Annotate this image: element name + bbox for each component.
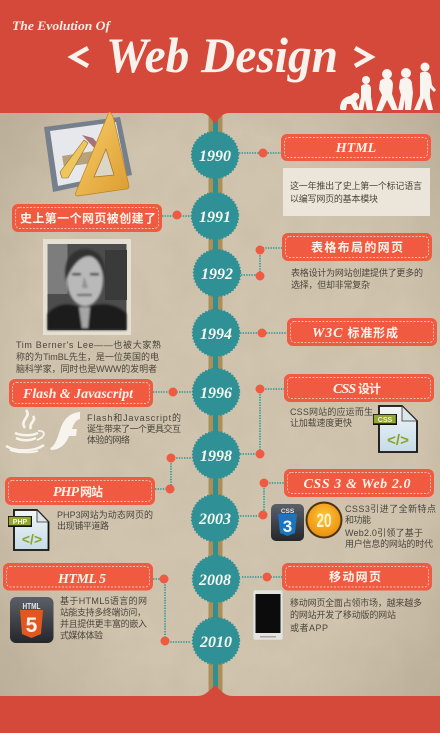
banner: CSS3 and Web 2.0 xyxy=(284,469,434,497)
year badge: 1996 xyxy=(193,369,239,415)
text: PHP description: PHP3网站为动态网页的 xyxy=(57,509,153,520)
text: CSS3 and Web 2.0 description: Web2.0引领了基于 xyxy=(345,527,423,538)
top header band xyxy=(0,0,440,124)
icon: CSS3 xyxy=(271,504,304,541)
text: CSS description: CSS网站的应运而生 xyxy=(290,406,373,417)
year badge: 2003 xyxy=(192,495,238,541)
banner: CSS3 and Web 2.0: CSS 3 & Web 2.0 xyxy=(304,477,410,492)
year badge: 1994: 1994 xyxy=(200,326,232,343)
text: mobile web description: 的网站开发了移动版的网站 xyxy=(290,609,396,620)
year badge: 1990 xyxy=(192,132,238,178)
year badge: 1990: 1990 xyxy=(199,148,231,165)
year badge: 1998 xyxy=(193,432,239,478)
text: mobile web description: 或者APP xyxy=(290,622,328,633)
text: HTML5 description xyxy=(60,595,147,640)
year badge: 2010 xyxy=(193,618,239,664)
icon: CSS file xyxy=(373,406,417,452)
text: CSS3 and Web 2.0 description: 和功能 xyxy=(345,514,371,525)
icon: PHP file xyxy=(8,510,48,550)
icon: web 2.0 coin xyxy=(306,502,342,538)
connector lines xyxy=(153,153,287,642)
icon: web 2.0 coin: 20 xyxy=(316,511,332,532)
icon: CSS3: CSS xyxy=(281,508,295,515)
year badge: 2003: 2003 xyxy=(198,511,231,528)
banner: table layout: 表格布局的网页 xyxy=(311,238,403,256)
text: flash description: 体验的网络 xyxy=(87,434,130,445)
connector dots xyxy=(160,148,272,646)
banner: HTML 5: HTML 5 xyxy=(57,572,106,587)
text: table layout description: 选择，但却非常复杂 xyxy=(291,279,370,290)
icon: CSS file: CSS xyxy=(378,417,393,424)
text: HTML5 description: 基于HTML5语言的网 xyxy=(60,595,147,606)
text: Tim Berners-Lee bio: 脑科学家，同时也是WWW的发明者 xyxy=(16,363,157,374)
icon: PHP file: PHP xyxy=(13,519,28,526)
banner: HTML 5 xyxy=(3,563,153,590)
main title: Web Design xyxy=(106,27,338,83)
year badge: 1996: 1996 xyxy=(200,385,232,402)
year badge: 2008: 2008 xyxy=(198,572,231,589)
banner: W3C: W3C 标准形成 xyxy=(312,324,398,341)
icon: PHP file: </> xyxy=(22,531,42,547)
banner: Flash & Javascript xyxy=(9,379,153,407)
banner: mobile web xyxy=(282,563,432,590)
text: HTML5 description: 式媒体体验 xyxy=(60,630,103,640)
text: CSS description xyxy=(290,406,373,428)
text: Tim Berners-Lee bio: 称的为TimBL先生，是一位英国的电 xyxy=(16,351,159,362)
text: CSS3 and Web 2.0 description xyxy=(345,503,436,549)
year badge: 2008 xyxy=(193,556,239,602)
subtitle: The Evolution Of xyxy=(12,18,112,33)
banner: HTML xyxy=(281,134,431,161)
banner: HTML: HTML xyxy=(335,141,376,156)
photo: Tim Berners-Lee xyxy=(43,239,131,335)
year badge: 1991: 1991 xyxy=(199,209,231,226)
icon: phone xyxy=(253,590,283,640)
text: HTML5 description: 站能支持多终端访问， xyxy=(60,606,146,618)
icon: flash logo xyxy=(50,412,80,450)
year badge: 1998: 1998 xyxy=(200,448,232,465)
text: Tim Berners-Lee bio xyxy=(16,339,161,374)
icon: CSS file: </> xyxy=(387,432,409,449)
year badge: 2010: 2010 xyxy=(199,634,232,651)
icon: CSS3: 3 xyxy=(283,517,292,536)
text: mobile web description: 移动网页全面占领市场，越来越多 xyxy=(290,597,422,608)
icon: drafting tools xyxy=(44,112,132,196)
text: CSS3 and Web 2.0 description: 用户信息的网站的时代 xyxy=(345,538,433,549)
year badge: 1994 xyxy=(193,310,239,356)
banner: first web page xyxy=(12,204,162,232)
text: flash description: 诞生带来了一个更具交互 xyxy=(87,423,181,434)
panel: HTML description: 以编写网页的基本模块 xyxy=(290,193,378,204)
text: PHP description: 出现铺平道路 xyxy=(57,520,109,531)
icon: HTML5: HTML xyxy=(22,601,40,611)
text: flash description xyxy=(87,412,181,445)
text: table layout description xyxy=(291,267,423,290)
bottom band xyxy=(0,685,440,733)
banner: Flash & Javascript: Flash & Javascript xyxy=(22,387,134,402)
banner: first web page: 史上第一个网页被创建了 xyxy=(20,210,156,226)
timeline spine xyxy=(208,112,222,692)
year badge: 1992 xyxy=(194,250,240,296)
text: HTML5 description: 并且提供更丰富的嵌入 xyxy=(60,618,147,629)
text: table layout description: 表格设计为网站创建提供了更多的 xyxy=(291,267,423,278)
text: CSS3 and Web 2.0 description: CSS3引进了全新特点 xyxy=(345,503,436,514)
banner: CSS design: CSS 设计 xyxy=(333,380,381,397)
text: flash description: Flash和Javascript的 xyxy=(87,412,181,423)
banner: mobile web: 移动网页 xyxy=(329,568,381,585)
banner: PHP sites: PHP 网站 xyxy=(53,483,103,500)
icon: evolution silhouettes xyxy=(340,62,436,111)
text: mobile web description xyxy=(290,597,422,633)
banner: W3C xyxy=(287,318,437,346)
banner: CSS design xyxy=(284,374,434,402)
text: Tim Berners-Lee bio: Tim Berner's Lee——也被大家熟 xyxy=(16,339,161,350)
year badge: 1991 xyxy=(192,193,238,239)
icon: HTML5: 5 xyxy=(26,614,38,637)
icon: HTML5 xyxy=(10,597,54,643)
panel: HTML description xyxy=(283,168,430,216)
icon: java cup xyxy=(6,410,44,452)
year badge: 1992: 1992 xyxy=(201,266,233,283)
text: PHP description xyxy=(57,509,153,531)
banner: PHP sites xyxy=(5,477,155,505)
text: CSS description: 让加载速度更快 xyxy=(290,417,352,428)
panel: HTML description: 这一年推出了史上第一个标记语言 xyxy=(290,180,422,191)
banner: table layout xyxy=(282,233,432,261)
